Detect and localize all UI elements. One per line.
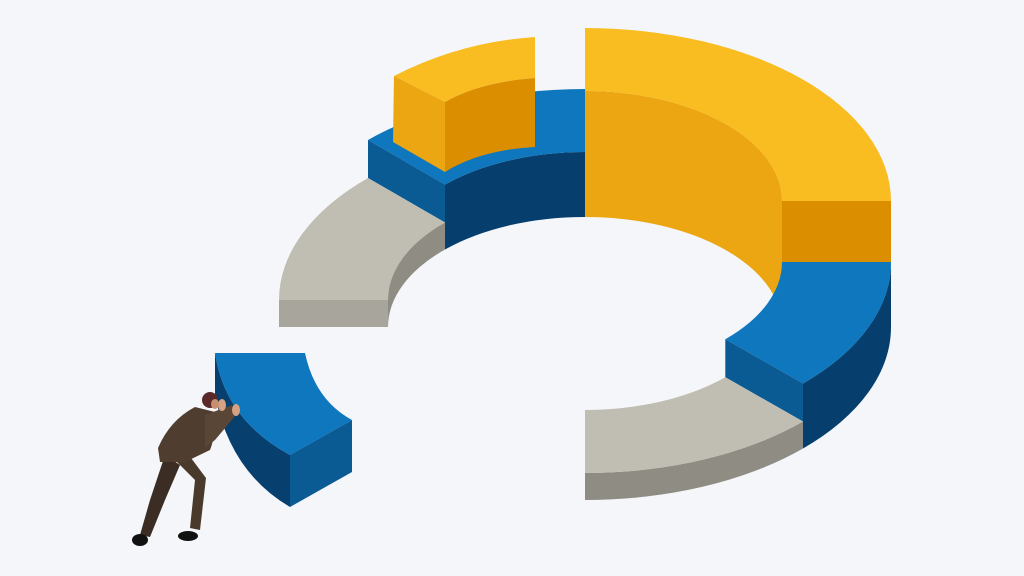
segment: back blue inner wall xyxy=(445,152,585,250)
hands xyxy=(232,404,240,416)
shoes xyxy=(132,534,148,546)
segment: right blue top face xyxy=(725,262,891,384)
ring chart xyxy=(279,28,891,500)
segment: right blue outer wall xyxy=(803,262,891,448)
front leg xyxy=(170,450,206,530)
segment: big yellow top face xyxy=(585,28,891,201)
loose blue piece xyxy=(215,353,352,507)
segment: back blue top face xyxy=(368,89,585,185)
segment: back blue cut face xyxy=(368,140,445,222)
segment: left gray inner wall xyxy=(388,222,445,327)
segment: big yellow cut face xyxy=(782,201,891,262)
head xyxy=(202,392,218,408)
back leg xyxy=(140,455,180,537)
segment: left gray cut face xyxy=(279,300,388,327)
segment: big yellow inner wall xyxy=(585,91,782,327)
segment: small yellow block xyxy=(393,37,535,172)
arm xyxy=(205,405,236,448)
segment: left gray top face xyxy=(279,178,445,300)
segment: front gray outer wall xyxy=(585,422,803,500)
torso xyxy=(158,407,215,462)
man pushing piece xyxy=(132,392,240,546)
segment: front gray top face xyxy=(585,377,803,473)
segment: right blue cut face xyxy=(725,339,803,422)
